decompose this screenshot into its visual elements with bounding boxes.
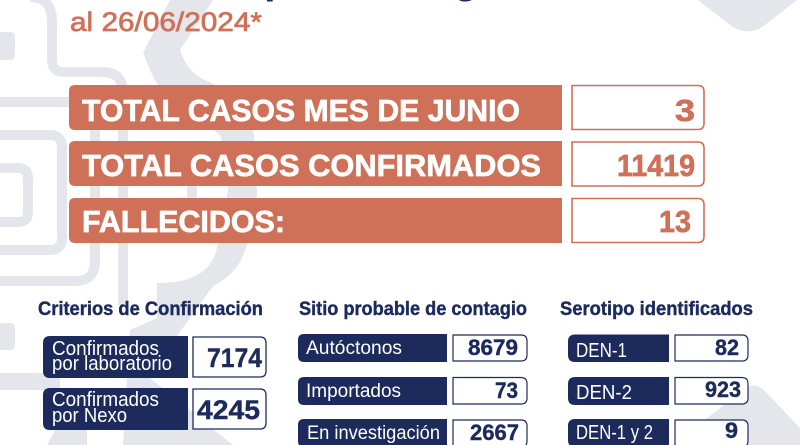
row: DEN-2: DEN-2 [576, 382, 632, 404]
panel: criterios de confirmación [38, 299, 266, 430]
row: confirmados por nexo: 4245 [197, 395, 260, 425]
panel: sitio probable de contagio [298, 299, 527, 445]
row: en investigación [298, 419, 527, 445]
row: importados: Importados [306, 381, 401, 402]
row: DEN-2: 923 [705, 377, 741, 402]
heading: serotipo: Serotipo identificados [560, 299, 753, 320]
summary row: total casos mes de junio: TOTAL CASOS MES DE JUNIO [82, 93, 520, 128]
summary row: fallecidos: FALLECIDOS: [82, 204, 285, 239]
row: DEN-1 y 2: DEN-1 y 2 [576, 422, 653, 444]
row: en investigación: 2667 [470, 420, 519, 445]
summary row: total casos confirmados [69, 141, 704, 186]
summary row: fallecidos: 13 [659, 204, 691, 239]
row: autóctonos [298, 334, 527, 362]
row: confirmados por nexo: por Nexo [52, 405, 127, 427]
summary row: fallecidos [69, 198, 704, 243]
date subtitle: al 26/06/2024* [70, 7, 263, 37]
row: confirmados por laboratorio [43, 336, 266, 378]
panel: serotipo identificados [560, 299, 753, 445]
summary row: total casos mes de junio [69, 85, 704, 130]
row: DEN-1 [568, 334, 748, 362]
row: confirmados por nexo: Confirmados [52, 389, 159, 411]
row: confirmados por laboratorio: Confirmados [52, 338, 159, 360]
heading: criterios: Criterios de Confirmación [38, 299, 263, 320]
row: DEN-1 y 2 [568, 418, 748, 445]
row: DEN-1: DEN-1 [576, 340, 627, 362]
row: autóctonos: Autóctonos [306, 338, 402, 359]
row: en investigación: En investigación [307, 423, 440, 444]
row: DEN-1 y 2: 9 [725, 418, 738, 443]
summary row: total casos confirmados: 11419 [617, 148, 695, 183]
row: confirmados por nexo [43, 388, 266, 430]
row: importados [298, 377, 527, 405]
summary row: total casos confirmados: TOTAL CASOS CONFIRMADOS [82, 148, 541, 183]
summary row: total casos mes de junio: 3 [675, 93, 695, 128]
row: confirmados por laboratorio: 7174 [207, 343, 262, 373]
row: importados: 73 [495, 378, 518, 403]
row: DEN-2 [568, 377, 748, 405]
heading: sitio probable: Sitio probable de contagio [299, 299, 527, 320]
row: confirmados por laboratorio: por laboratorio [52, 353, 172, 375]
row: autóctonos: 8679 [468, 335, 518, 360]
row: DEN-1: 82 [715, 335, 739, 360]
